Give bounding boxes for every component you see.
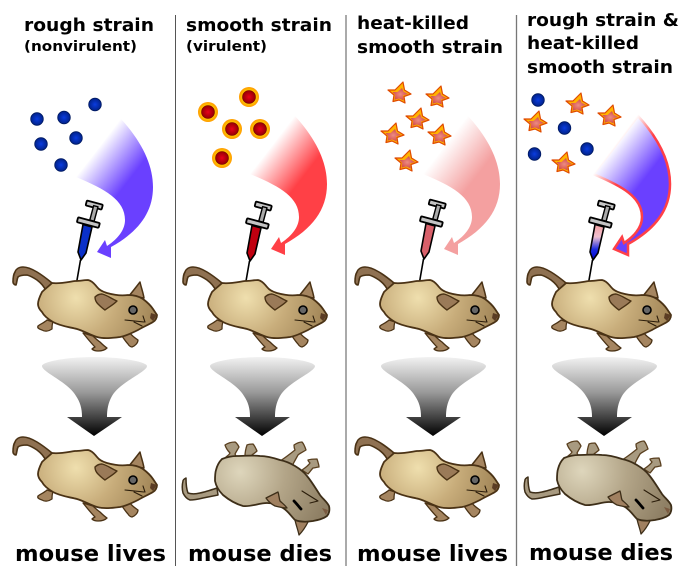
icon: heat-killed bacteria xyxy=(381,82,451,171)
heading: rough strain & heat-killed smooth strain: smooth strain xyxy=(527,57,673,78)
icon: red smooth bacteria xyxy=(198,87,270,168)
arrow: outcome funnel xyxy=(210,357,315,436)
heading: smooth strain (virulent): (virulent) xyxy=(186,39,267,55)
arrow: outcome funnel xyxy=(381,357,486,436)
heading: rough strain (nonvirulent) xyxy=(24,15,154,55)
heading: rough strain & heat-killed smooth strain xyxy=(527,10,679,78)
heading: smooth strain (virulent) xyxy=(186,15,332,55)
heading: heat-killed smooth strain: heat-killed xyxy=(357,13,469,34)
arrow: mixed bacteria into syringe xyxy=(593,116,670,255)
icon: live mouse result xyxy=(13,437,157,521)
heading: rough strain (nonvirulent): (nonvirulent) xyxy=(24,39,137,55)
label: mouse lives: mouse lives xyxy=(15,542,166,567)
label: mouse dies: mouse dies xyxy=(188,542,332,567)
panel: heat-killed smooth strain xyxy=(355,13,508,567)
icon: injected mouse xyxy=(355,267,499,351)
heading: heat-killed smooth strain: smooth strain xyxy=(357,37,503,58)
icon: mixed bacteria xyxy=(524,93,621,173)
icon: live mouse xyxy=(13,267,157,351)
heading: rough strain & heat-killed smooth strain: rough strain & xyxy=(527,10,679,31)
icon: syringe with red fill xyxy=(246,202,272,284)
icon: syringe with blue fill xyxy=(76,201,103,283)
icon: dead mouse xyxy=(524,441,671,534)
icon: injected mouse xyxy=(183,267,327,351)
icon: syringe with pink fill xyxy=(420,200,446,282)
arrow: outcome funnel xyxy=(42,357,147,436)
heading: smooth strain (virulent): smooth strain xyxy=(186,15,332,36)
icon: blue rough bacteria xyxy=(31,98,101,171)
icon: live mouse result xyxy=(355,437,499,521)
heading: rough strain (nonvirulent): rough strain xyxy=(24,15,154,36)
panel: rough strain xyxy=(13,15,166,567)
label: mouse lives: mouse lives xyxy=(357,542,508,567)
arrow: bacteria into syringe xyxy=(423,116,500,255)
icon: injected mouse xyxy=(527,267,671,351)
icon: dead mouse xyxy=(182,442,329,535)
column dividers xyxy=(176,15,516,566)
panel: smooth strain xyxy=(182,15,332,567)
icon: syringe with mixed fill xyxy=(588,201,615,283)
heading: heat-killed smooth strain xyxy=(357,13,503,58)
arrow: bacteria into syringe xyxy=(76,119,153,258)
heading: rough strain & heat-killed smooth strain: heat-killed xyxy=(527,33,639,54)
label: mouse dies: mouse dies xyxy=(529,541,673,566)
arrow: bacteria into syringe xyxy=(250,116,327,255)
arrow: outcome funnel xyxy=(552,357,657,436)
panel: rough and heat-killed mixture xyxy=(524,10,679,566)
